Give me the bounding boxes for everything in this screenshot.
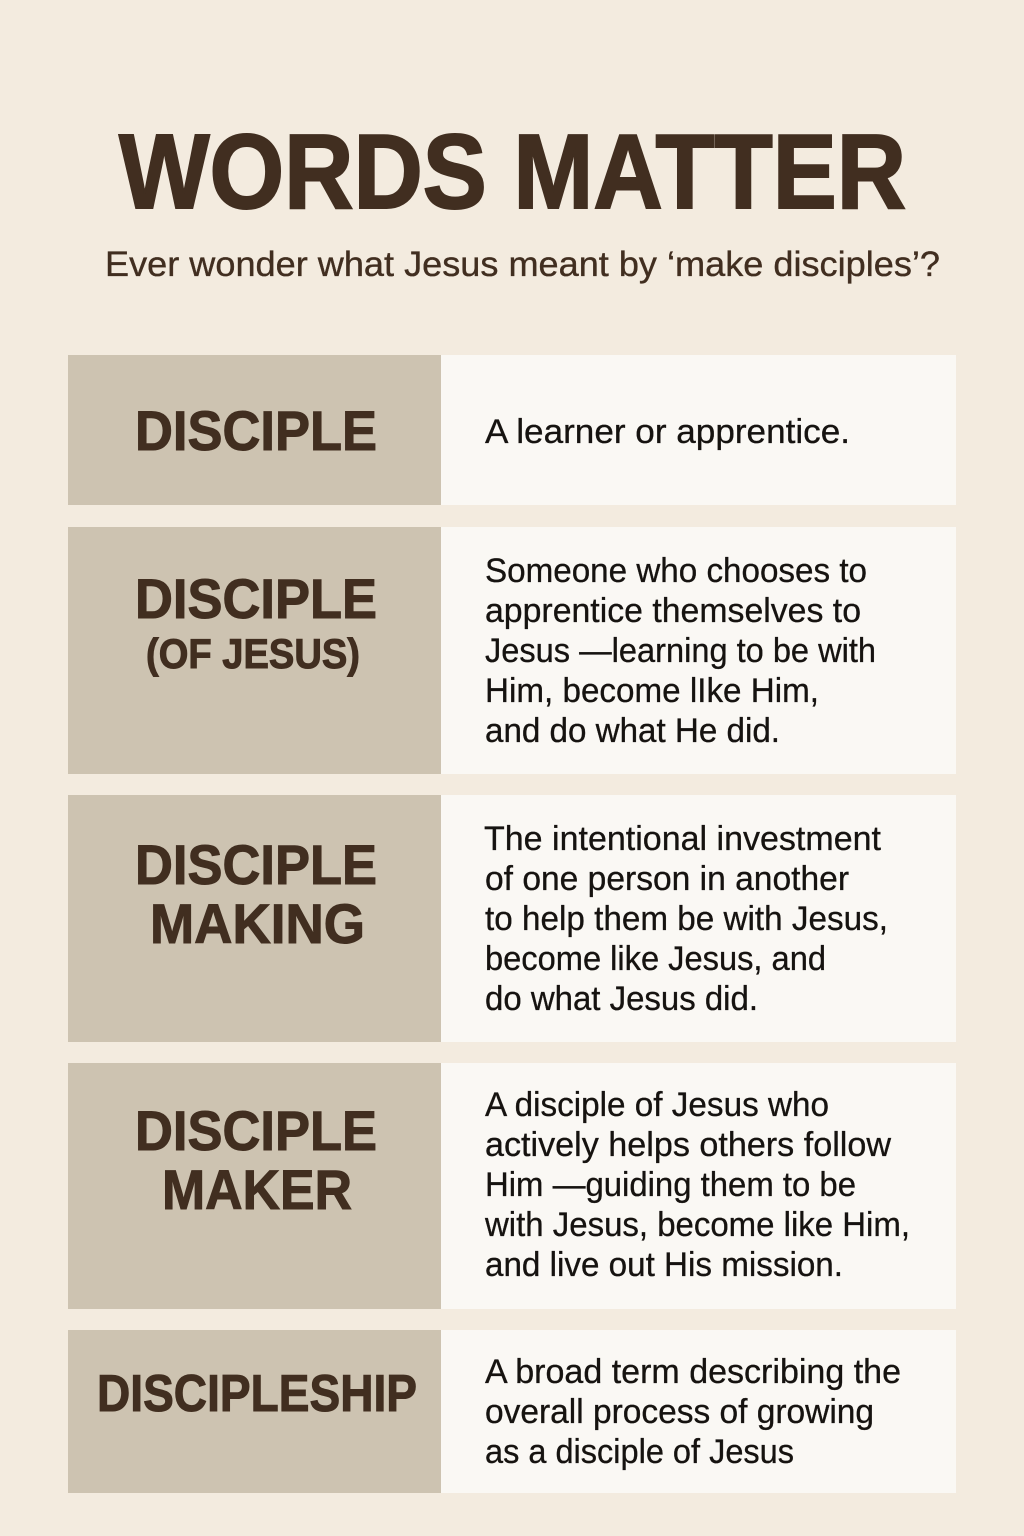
definition panel: Disciple Maker — [441, 1063, 956, 1309]
term panel: Disciple of Jesus — [68, 527, 441, 774]
definition: Disciple Making: of one person in another — [485, 860, 849, 898]
definition: Disciple Making: do what Jesus did. — [485, 980, 758, 1018]
term: Disciple of Jesus: (OF JESUS) — [146, 630, 360, 677]
term: Disciple of Jesus — [135, 567, 377, 677]
definition: Disciple Maker — [484, 1086, 910, 1284]
panel: row 1 Disciple — [68, 355, 956, 505]
term panel: Discipleship — [68, 1330, 441, 1493]
definition: Disciple: A learner or apprentice. — [485, 413, 850, 451]
title: WORDS MATTER — [119, 113, 906, 231]
definition: Disciple Maker: with Jesus, become like Him, — [484, 1206, 910, 1244]
definition: Disciple Making: The intentional investment — [484, 820, 882, 858]
definition: Disciple Making: to help them be with Jesus, — [485, 900, 888, 938]
definition: Discipleship: overall process of growing — [485, 1393, 874, 1431]
term: Disciple of Jesus: DISCIPLE — [135, 567, 377, 630]
term panel: Disciple Making — [68, 795, 441, 1042]
definition: Discipleship — [485, 1353, 901, 1471]
definition: Discipleship: A broad term describing the — [485, 1353, 901, 1391]
definition panel: Disciple — [441, 355, 956, 505]
definition: Disciple Maker: A disciple of Jesus who — [485, 1086, 829, 1124]
definition panel: Disciple Making — [441, 795, 956, 1042]
term: Disciple Maker — [135, 1099, 377, 1221]
term: Discipleship: DISCIPLESHIP — [97, 1365, 417, 1423]
panel: row 2 Disciple of Jesus — [68, 527, 956, 774]
definition: Disciple Making: become like Jesus, and — [485, 940, 826, 978]
definition: Disciple Making — [484, 820, 888, 1018]
definition: Disciple Maker: and live out His mission. — [485, 1246, 843, 1284]
definition: Disciple of Jesus — [485, 552, 876, 750]
term panel: Disciple Maker — [68, 1063, 441, 1309]
term: Disciple Making: MAKING — [150, 892, 365, 955]
definition: Disciple Maker: actively helps others follow — [485, 1126, 891, 1164]
definition: Disciple Maker: Him —guiding them to be — [485, 1166, 856, 1204]
definition: Disciple of Jesus: apprentice themselves to — [485, 592, 861, 630]
term: Disciple Making: DISCIPLE — [135, 833, 377, 896]
definition panel: Discipleship — [441, 1330, 956, 1493]
term panel: Disciple — [68, 355, 441, 505]
definition: Disciple of Jesus: Someone who chooses to — [485, 552, 867, 590]
panel: row 4 Disciple Maker — [68, 1063, 956, 1309]
term: Disciple Maker: DISCIPLE — [135, 1099, 377, 1162]
panel: row 5 Discipleship — [68, 1330, 956, 1493]
panel: row 3 Disciple Making — [68, 795, 956, 1042]
term: Disciple Maker: MAKER — [162, 1158, 352, 1221]
term: Disciple: DISCIPLE — [135, 399, 377, 462]
definition: Disciple of Jesus: Him, become lIke Him, — [485, 672, 819, 710]
subtitle: Ever wonder what Jesus meant by ‘make disciples’? — [105, 245, 940, 284]
definition: Disciple of Jesus: and do what He did. — [485, 712, 780, 750]
definition panel: Disciple of Jesus — [441, 527, 956, 774]
term: Disciple Making — [135, 833, 377, 955]
definition: Disciple of Jesus: Jesus —learning to be with — [485, 632, 876, 670]
definition: Discipleship: as a disciple of Jesus — [485, 1433, 794, 1471]
